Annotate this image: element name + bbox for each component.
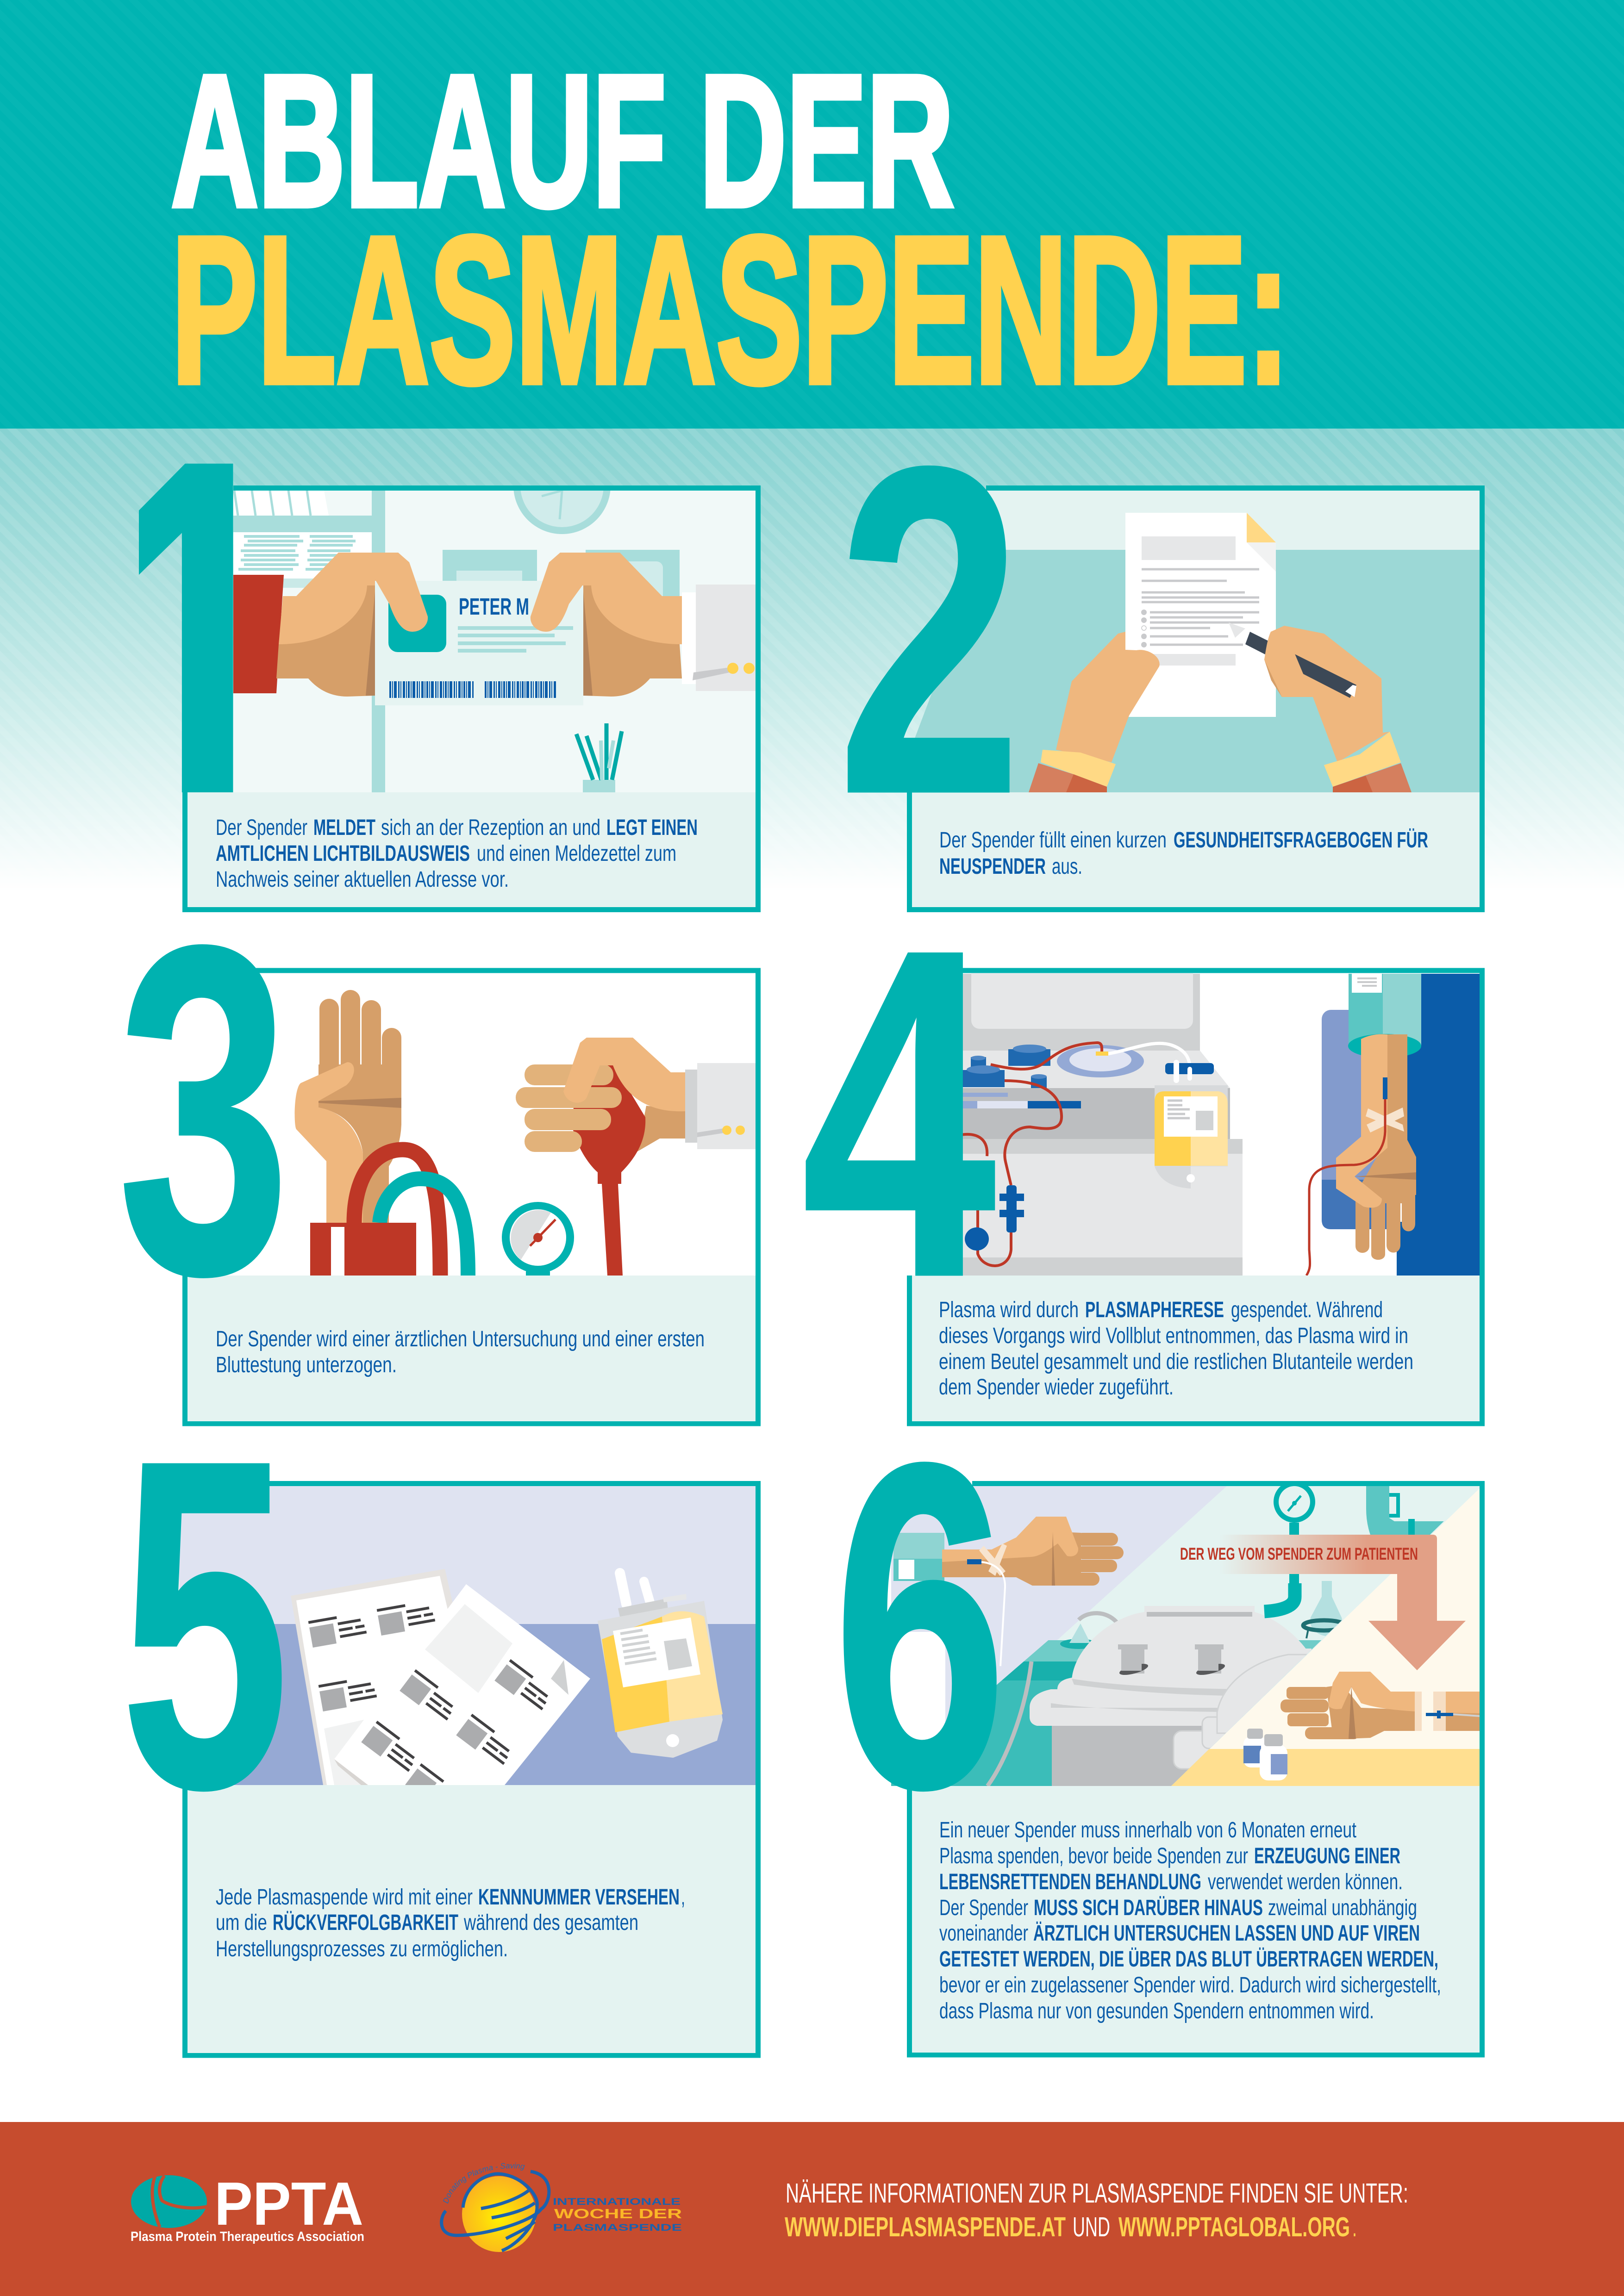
number 1: 1: [98, 342, 300, 974]
text: step 5: Herstellungsprozesses zu ermöglichen.: [216, 1937, 508, 1961]
text: step 6: zweimal unabhängig: [1268, 1896, 1417, 1920]
footer info text: UND: [1073, 2212, 1110, 2242]
logo: PPTA: PPTA: [214, 2170, 363, 2238]
frame: [185, 488, 758, 910]
logo: Internationale Woche der Plasmaspende: Donating Plasma - Saving Lives: [0, 0, 525, 2204]
footer info text: [785, 2178, 1408, 2242]
number 4: 4: [801, 852, 998, 1374]
text: step 1: MELDET: [313, 815, 375, 840]
logo: PPTA: Plasma Protein Therapeutics Association: [131, 2229, 364, 2244]
text: step 5: KENNNUMMER VERSEHEN: [478, 1885, 680, 1910]
background gradient: [0, 429, 1624, 891]
illustration: questionnaire and pen: [907, 491, 1480, 792]
text: step 6: ÄRZTLICH UNTERSUCHEN LASSEN UND AUF VIREN: [1033, 1921, 1420, 1946]
header banner: [0, 0, 1624, 429]
text: step 4: einem Beutel gesammelt und die restlichen Blutanteile werden: [939, 1350, 1413, 1374]
text: step 1: und einen Meldezettel zum: [477, 841, 676, 866]
text: step 1: AMTLICHEN LICHTBILDAUSWEIS: [216, 841, 470, 866]
logo: Internationale Woche der Plasmaspende: WOCHE DER: [554, 2207, 682, 2221]
text: step 4: Plasma wird durch: [939, 1298, 1079, 1322]
text: step 2: Der Spender füllt einen kurzen: [939, 828, 1167, 852]
frame: [909, 1484, 1482, 2055]
text: step 5: um die: [216, 1910, 267, 1935]
panel: step 3: [118, 849, 758, 1424]
number 3: 3: [118, 849, 290, 1371]
panel: step 1: [139, 464, 761, 912]
arrow label: DER WEG VOM SPENDER ZUM PATIENTEN: [1180, 1544, 1418, 1563]
text: step 4: [939, 1298, 1413, 1400]
number 6: 6: [833, 1367, 1007, 1884]
logo: PPTA: [131, 2170, 364, 2244]
text: step 5: während des gesamten: [463, 1910, 638, 1935]
text: step 5: [216, 1885, 685, 1961]
frame: [185, 1484, 758, 2055]
text: step 6: LEBENSRETTENDEN BEHANDLUNG: [939, 1870, 1201, 1894]
text: step 1: [216, 815, 698, 892]
illustration: route from donor to patient: [880, 1481, 1481, 1786]
text: step 6: voneinander: [939, 1921, 1028, 1946]
text: step 1: LEGT EINEN: [606, 815, 698, 840]
text: step 2: aus.: [1052, 854, 1082, 879]
text: step 1: Nachweis seiner aktuellen Adresse vor.: [216, 867, 509, 892]
title line 1: ABLAUF DER: [171, 36, 954, 245]
text: step 4: dem Spender wieder zugeführt.: [939, 1375, 1174, 1400]
footer info text: .: [1352, 2212, 1357, 2242]
text: step 6: dass Plasma nur von gesunden Spendern entnommen wird.: [939, 1999, 1374, 2023]
number 2: 2: [837, 371, 1022, 890]
footer info text: WWW.PPTAGLOBAL.ORG: [1118, 2212, 1350, 2242]
text: step 6: Der Spender: [939, 1896, 1028, 1920]
name on card: PETER M: [459, 593, 529, 620]
text: step 6: ERZEUGUNG EINER: [1254, 1844, 1400, 1868]
illustration: plasmapheresis machine and donor arm: [958, 953, 1480, 1276]
text: step 5: Jede Plasmaspende wird mit einer: [216, 1885, 473, 1910]
text: step 1: sich an der Rezeption an und: [381, 815, 600, 840]
illustration: reception hands and ID card: [233, 491, 756, 792]
text: step 4: dieses Vorgangs wird Vollblut entnommen, das Plasma wird in: [939, 1324, 1408, 1348]
text: step 6: MUSS SICH DARÜBER HINAUS: [1034, 1896, 1263, 1920]
footer info text: WWW.DIEPLASMASPENDE.AT: [785, 2212, 1066, 2242]
text: step 5: RÜCKVERFOLGBARKEIT: [273, 1910, 458, 1935]
text: step 6: Ein neuer Spender muss innerhalb von 6 Monaten erneut: [939, 1818, 1356, 1842]
arrow: [1180, 1535, 1466, 1670]
text: step 4: PLASMAPHERESE: [1085, 1298, 1224, 1322]
panel: step 2: [848, 466, 1485, 912]
panel: step 6: [833, 1367, 1482, 2055]
text: step 6: [939, 1818, 1441, 2023]
text: step 5: ,: [681, 1885, 685, 1910]
text: step 3: Bluttestung unterzogen.: [216, 1353, 397, 1377]
text: step 3: [216, 1327, 705, 1377]
text: step 2: GESUNDHEITSFRAGEBOGEN FÜR: [1174, 828, 1428, 852]
panel: step 5: [120, 1363, 758, 2055]
text: step 6: verwendet werden können.: [1208, 1870, 1403, 1894]
number 5: 5: [120, 1363, 289, 1885]
text: step 2: NEUSPENDER: [939, 854, 1046, 879]
frame: [185, 971, 758, 1424]
illustration: hand, blood pressure cuff and gauge: [295, 990, 756, 1276]
frame: [909, 488, 1482, 910]
logo: Internationale Woche der Plasmaspende: INTERNATIONALE: [553, 2196, 681, 2207]
text: step 2: [939, 828, 1428, 879]
illustration: labels and plasma bag: [176, 1486, 756, 1818]
text: step 6: bevor er ein zugelassener Spender wird. Dadurch wird sichergestellt,: [939, 1973, 1441, 1997]
text: step 6: Plasma spenden, bevor beide Spenden zur: [939, 1844, 1248, 1868]
frame: [909, 971, 1482, 1424]
logo: Internationale Woche der Plasmaspende: PLASMASPENDE: [553, 2222, 682, 2233]
text: step 1: Der Spender: [216, 815, 307, 840]
text: step 3: Der Spender wird einer ärztlichen Untersuchung und einer ersten: [216, 1327, 705, 1351]
text: step 4: gespendet. Während: [1231, 1298, 1383, 1322]
panel: step 4: [806, 952, 1485, 1426]
